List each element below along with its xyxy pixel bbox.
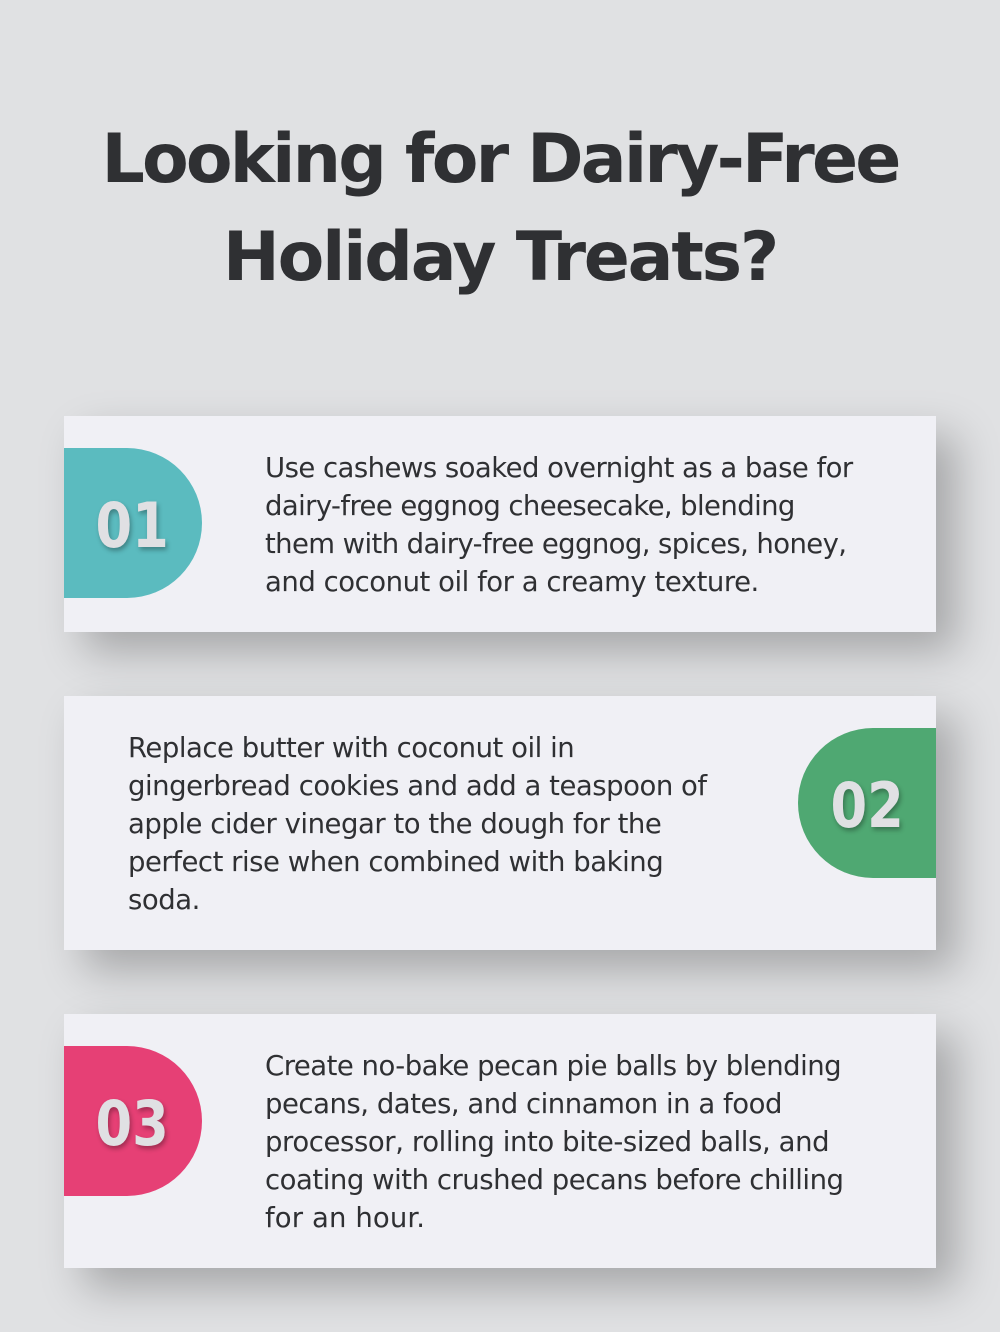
text: step 1: Use cashews soaked overnight as a base for (265, 452, 853, 484)
text: step 2: perfect rise when combined with baking (128, 846, 663, 878)
text: step 2: soda. (128, 884, 200, 916)
panel: step 3 (64, 1014, 936, 1268)
badge: 03 (64, 1046, 202, 1196)
badge: 02: 02 (830, 768, 904, 842)
badge: 01: 01 (95, 488, 169, 562)
text: step 1: them with dairy-free eggnog, spices, honey, (265, 528, 846, 560)
badge: 01 (64, 448, 202, 598)
text: step 3: processor, rolling into bite-sized balls, and (265, 1126, 829, 1158)
text: step 1: and coconut oil for a creamy texture. (265, 566, 759, 598)
text: step 3 (265, 1050, 844, 1234)
title: Looking for Dairy-Free (101, 120, 899, 199)
text: step 2: Replace butter with coconut oil in (128, 732, 574, 764)
text: step 3: Create no-bake pecan pie balls by blending (265, 1050, 841, 1082)
title (101, 120, 899, 297)
text: step 3: for an hour. (265, 1202, 425, 1234)
text: step 3: pecans, dates, and cinnamon in a food (265, 1088, 782, 1120)
text: step 2: gingerbread cookies and add a teaspoon of (128, 770, 707, 802)
text: step 1: dairy-free eggnog cheesecake, blending (265, 490, 795, 522)
panel: step 2 (64, 696, 936, 950)
title: Holiday Treats? (223, 218, 777, 297)
badge: 03: 03 (95, 1086, 169, 1160)
text: step 2 (128, 732, 708, 916)
text: step 3: coating with crushed pecans before chilling (265, 1164, 844, 1196)
text: step 1 (265, 452, 854, 598)
text: step 2: apple cider vinegar to the dough for the (128, 808, 661, 840)
panel: step 1 (64, 416, 936, 632)
badge: 02 (798, 728, 936, 878)
